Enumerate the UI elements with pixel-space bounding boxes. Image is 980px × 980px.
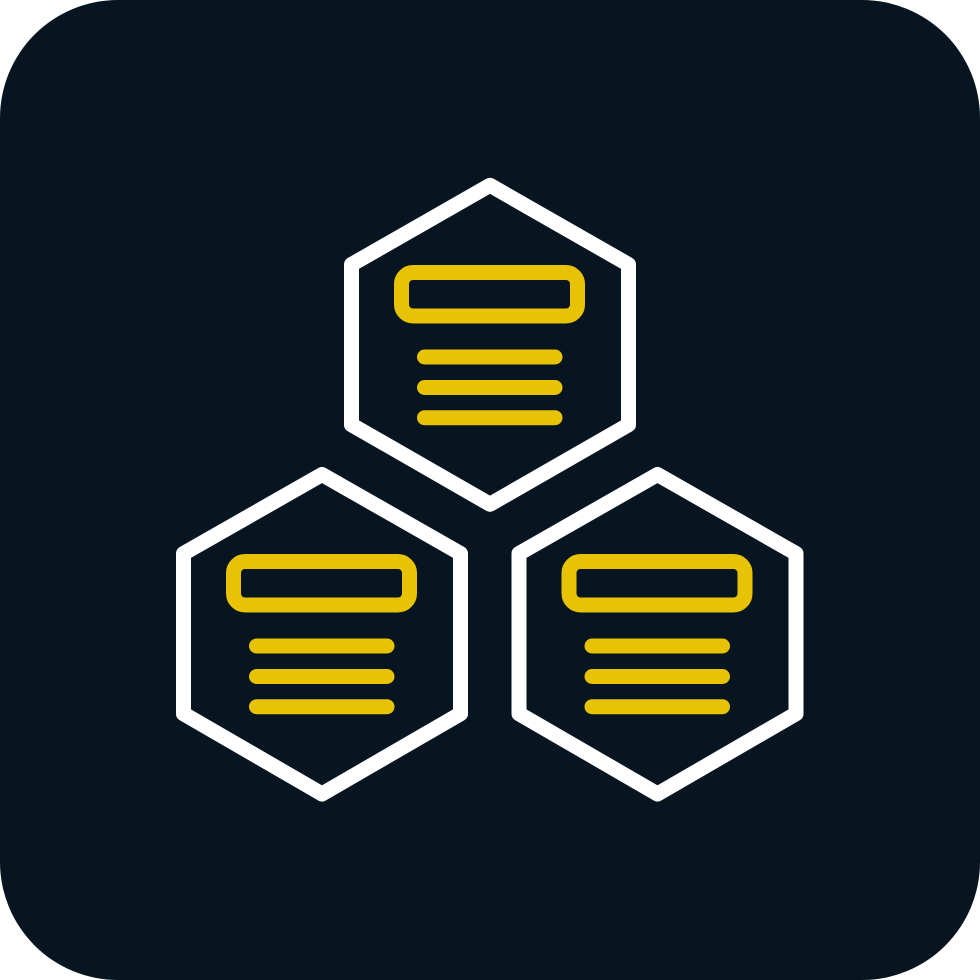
text lines: top (424, 357, 555, 418)
hexagon block: top (352, 185, 628, 504)
hexagon outline: top (352, 185, 628, 504)
header box: bottom left (234, 562, 410, 605)
hexagon outline: bottom right (519, 474, 796, 794)
header box: bottom right (569, 562, 745, 605)
text lines: bottom right (592, 646, 722, 707)
hexagon outline: bottom left (184, 474, 460, 794)
hexagon block: bottom left (184, 474, 460, 794)
header box: top (402, 272, 578, 316)
text lines: bottom left (256, 646, 387, 707)
hexagon block: bottom right (519, 474, 796, 794)
